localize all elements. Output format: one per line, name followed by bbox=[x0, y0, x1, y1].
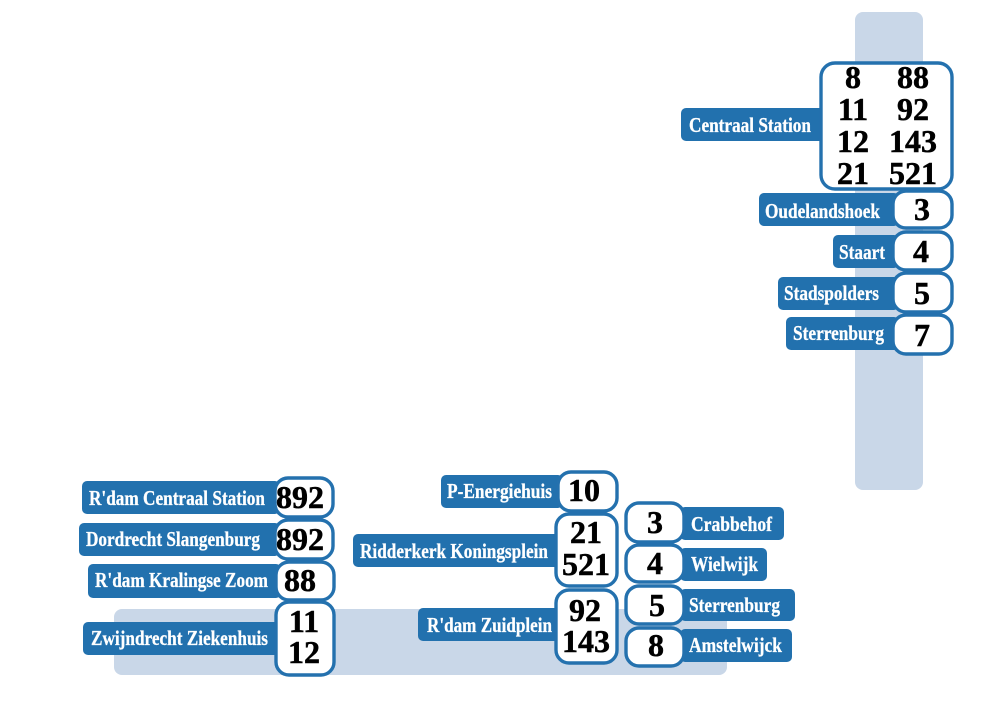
stop: Centraal Station: Centraal Station bbox=[689, 113, 811, 137]
stop: Centraal Station: 12 bbox=[837, 123, 869, 159]
stop: Ridderkerk Koningsplein: 521 bbox=[562, 546, 610, 582]
stop: Sterrenburg (south): 5 bbox=[649, 587, 665, 623]
stop: Sterrenburg (east): Sterrenburg bbox=[793, 321, 884, 345]
stop: Amstelwijck bbox=[626, 627, 792, 666]
stop: Centraal Station: 143 bbox=[889, 123, 937, 159]
stop: Sterrenburg (east): 7 bbox=[914, 317, 930, 353]
stop: Zwijndrecht Ziekenhuis: 11 bbox=[289, 603, 319, 639]
stop: Staart bbox=[833, 232, 952, 270]
stop: R'dam Zuidplein: R'dam Zuidplein bbox=[427, 613, 552, 637]
stop: Staart: 4 bbox=[913, 233, 929, 269]
stop: Centraal Station bbox=[681, 59, 952, 191]
stop: Dordrecht Slangenburg: 892 bbox=[276, 521, 324, 557]
stop: Stadspolders bbox=[778, 273, 952, 312]
stop: Wielwijk bbox=[626, 545, 767, 582]
stop: Oudelandshoek: 3 bbox=[914, 191, 930, 227]
stop: Sterrenburg (east) bbox=[786, 315, 952, 354]
stop: R'dam Centraal Station: 892 bbox=[276, 479, 324, 515]
stop: P-Energiehuis: 10 bbox=[568, 472, 600, 508]
stop: R'dam Kralingse Zoom bbox=[88, 562, 334, 600]
stop: Crabbehof: Crabbehof bbox=[691, 512, 773, 536]
stop: Centraal Station: 8 bbox=[845, 59, 861, 95]
stop: Zwijndrecht Ziekenhuis bbox=[83, 602, 334, 675]
stop: Crabbehof: 3 bbox=[647, 504, 663, 540]
stop: Oudelandshoek: Oudelandshoek bbox=[765, 199, 880, 223]
stop: Stadspolders: Stadspolders bbox=[784, 281, 879, 305]
stop: R'dam Zuidplein: 143 bbox=[562, 623, 610, 659]
stop: R'dam Kralingse Zoom: R'dam Kralingse Zoom bbox=[95, 568, 268, 592]
stop: Centraal Station: 88 bbox=[897, 59, 929, 95]
stop: Centraal Station: 11 bbox=[838, 91, 868, 127]
stop: Sterrenburg (south) bbox=[626, 586, 795, 624]
horizontal route band bbox=[114, 609, 727, 675]
stop: P-Energiehuis bbox=[441, 472, 617, 511]
stop: Zwijndrecht Ziekenhuis: 12 bbox=[288, 634, 320, 670]
stop: Wielwijk: Wielwijk bbox=[691, 552, 758, 576]
stop: Crabbehof bbox=[626, 503, 784, 542]
stop: R'dam Centraal Station bbox=[82, 478, 333, 517]
stop: Dordrecht Slangenburg: Dordrecht Slangenburg bbox=[86, 527, 260, 551]
stop: Amstelwijck: 8 bbox=[648, 627, 664, 663]
vertical route band bbox=[855, 12, 923, 490]
stop: R'dam Zuidplein bbox=[418, 590, 617, 663]
stop: Centraal Station: 21 bbox=[837, 155, 869, 191]
stop: Ridderkerk Koningsplein bbox=[353, 514, 617, 586]
stop: Oudelandshoek bbox=[759, 191, 952, 228]
stop: Sterrenburg (south): Sterrenburg bbox=[689, 593, 780, 617]
stop: Centraal Station: 92 bbox=[897, 91, 929, 127]
stop: R'dam Kralingse Zoom: 88 bbox=[284, 562, 316, 598]
stop: Amstelwijck: Amstelwijck bbox=[689, 633, 782, 657]
stop: Zwijndrecht Ziekenhuis: Zwijndrecht Ziekenhuis bbox=[91, 626, 268, 650]
stop: R'dam Zuidplein: 92 bbox=[569, 592, 601, 628]
stop: Stadspolders: 5 bbox=[914, 275, 930, 311]
stop: R'dam Centraal Station: R'dam Centraal Station bbox=[89, 486, 265, 510]
stop: P-Energiehuis: P-Energiehuis bbox=[447, 479, 552, 503]
stop: Wielwijk: 4 bbox=[647, 545, 663, 581]
stop: Ridderkerk Koningsplein: 21 bbox=[570, 514, 602, 550]
stop: Staart: Staart bbox=[839, 240, 885, 264]
stop: Dordrecht Slangenburg bbox=[79, 520, 333, 559]
stop: Centraal Station: 521 bbox=[889, 155, 937, 191]
stop: Ridderkerk Koningsplein: Ridderkerk Koningsplein bbox=[360, 539, 548, 563]
